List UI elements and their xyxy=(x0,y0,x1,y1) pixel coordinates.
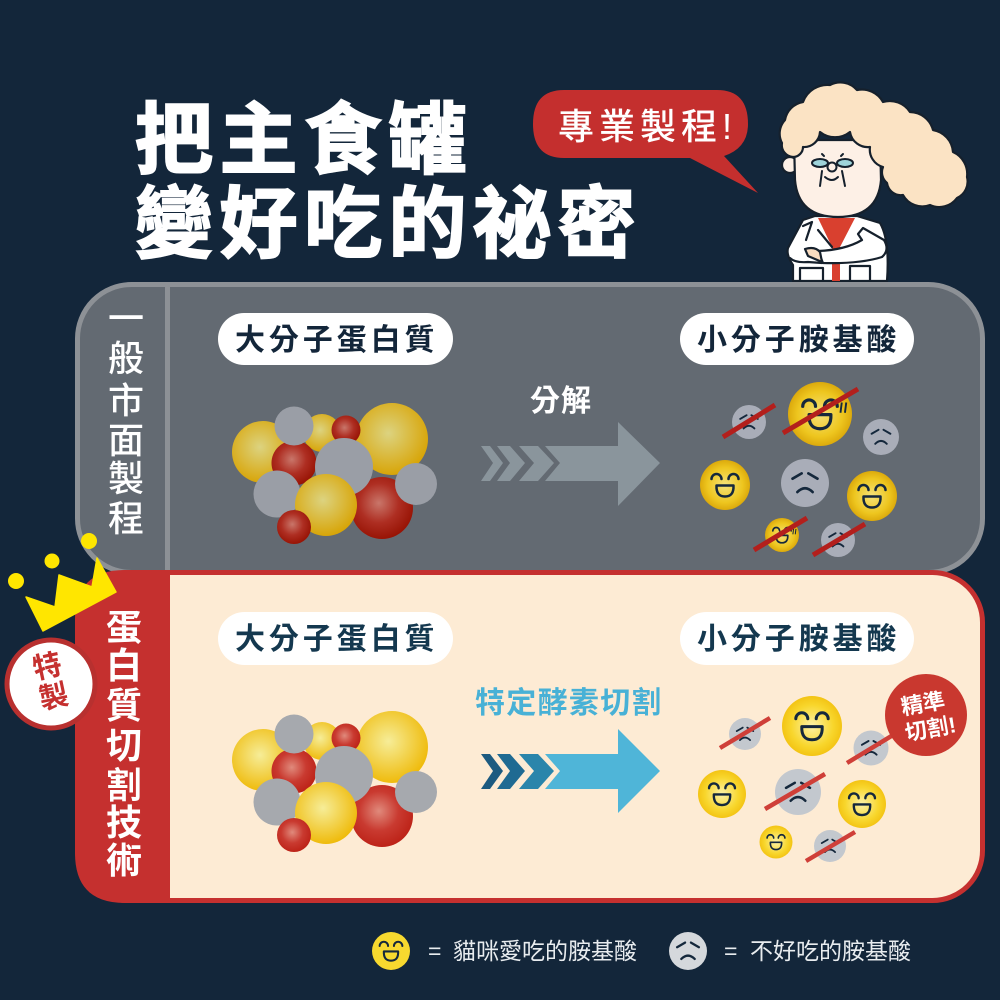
legend: untasty amino acid: = xyxy=(724,938,737,964)
right forearm xyxy=(818,228,887,263)
hair xyxy=(780,82,968,207)
special badge: 製 xyxy=(36,678,71,716)
special badge: 特 xyxy=(30,648,65,686)
pill: small amino acid xyxy=(680,313,914,365)
vertical label: 割 xyxy=(106,765,142,806)
panel: protein cutting technology xyxy=(75,570,982,903)
title: 把主食罐 xyxy=(135,96,473,184)
vertical label: 切 xyxy=(106,725,142,766)
vertical label: 一 xyxy=(108,298,144,339)
vertical label: 白 xyxy=(106,645,142,686)
legend: tasty amino acid: 貓咪愛吃的胺基酸 xyxy=(453,938,637,964)
nose and mouth xyxy=(820,154,845,186)
ears xyxy=(782,157,894,174)
pill: large protein xyxy=(218,313,453,365)
crown xyxy=(8,533,116,631)
pill: small amino acid xyxy=(680,612,914,665)
vertical label xyxy=(108,298,144,539)
decompose label: 分解 xyxy=(530,385,592,418)
precise cut badge: 切割! xyxy=(903,712,958,746)
character: scientist xyxy=(780,82,968,281)
legend: tasty amino acid: = xyxy=(428,938,441,964)
speech bubble: 專業製程! xyxy=(558,106,737,147)
hand xyxy=(805,248,822,262)
left arm and pockets xyxy=(790,258,870,281)
precise cut badge: 精準 xyxy=(899,688,947,720)
tie xyxy=(818,218,855,281)
pill: large protein: 大分子蛋白質 xyxy=(235,324,438,357)
vertical label: 製 xyxy=(108,458,144,499)
grey arrow xyxy=(481,422,660,506)
pill: large protein: 大分子蛋白質 xyxy=(235,623,438,656)
vertical label: 面 xyxy=(108,420,144,461)
pill: large protein xyxy=(218,612,453,665)
special badge xyxy=(7,640,95,728)
glasses xyxy=(812,159,853,167)
pill: small amino acid: 小分子胺基酸 xyxy=(697,623,900,656)
title xyxy=(135,96,642,268)
amino acid faces xyxy=(700,382,899,557)
vertical label: 市 xyxy=(108,380,144,421)
legend: tasty amino acid xyxy=(372,932,637,970)
vertical label: 質 xyxy=(106,685,142,726)
speech bubble xyxy=(533,90,758,193)
precise cut badge xyxy=(885,674,967,756)
pill: small amino acid: 小分子胺基酸 xyxy=(697,324,900,357)
legend: untasty amino acid: 不好吃的胺基酸 xyxy=(750,938,911,964)
enzyme cutting label: 特定酵素切割 xyxy=(475,687,663,720)
vertical label: 程 xyxy=(108,498,144,539)
vertical label: 術 xyxy=(106,840,142,881)
vertical label: 般 xyxy=(108,338,144,379)
legend xyxy=(372,932,911,970)
lab coat xyxy=(788,216,888,281)
protein cluster xyxy=(232,403,437,544)
panel: general market process xyxy=(78,284,982,572)
face xyxy=(794,140,881,217)
vertical label: 蛋 xyxy=(106,607,142,648)
protein cluster xyxy=(232,711,437,852)
vertical label xyxy=(106,607,142,881)
vertical label: 技 xyxy=(106,802,142,843)
blue arrow xyxy=(481,729,660,813)
amino acid faces xyxy=(698,696,893,862)
title: 變好吃的祕密 xyxy=(135,180,642,268)
lapel fold lines xyxy=(803,222,832,247)
legend: untasty amino acid xyxy=(669,932,911,970)
